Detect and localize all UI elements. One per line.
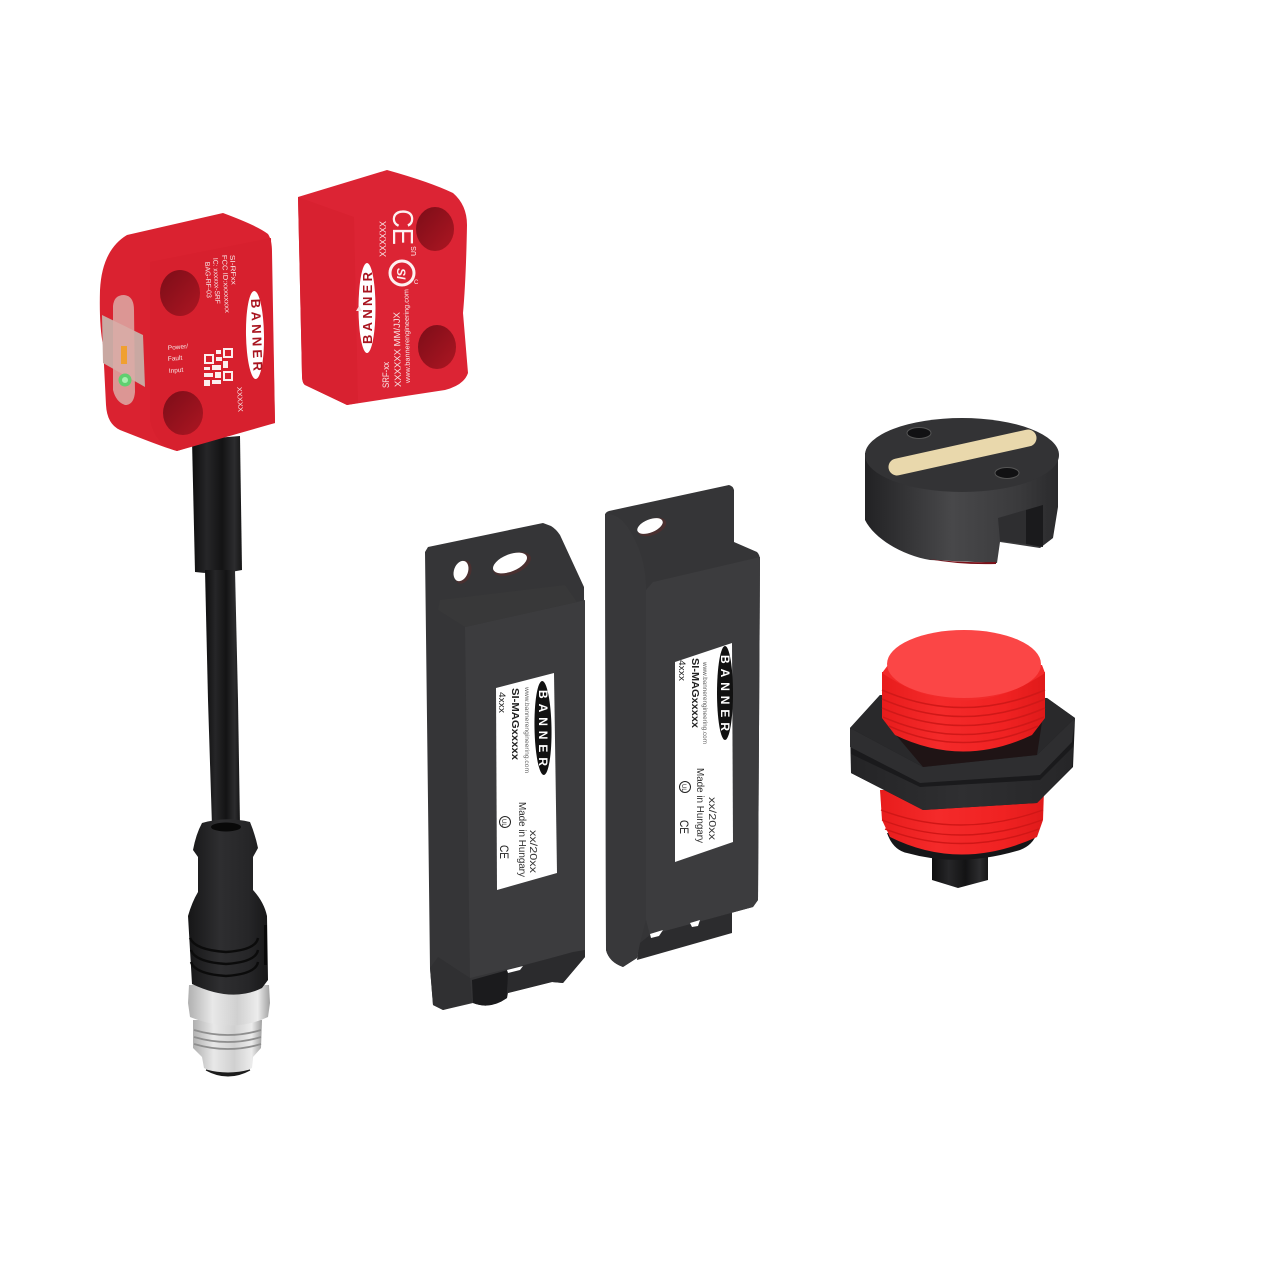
bottom tab xyxy=(507,950,585,993)
label: SI-MAGxxxxx xyxy=(509,688,520,760)
label: Made in Hungary xyxy=(694,768,705,843)
sensing insert xyxy=(897,438,1028,467)
threaded barrel sensor xyxy=(850,630,1075,888)
product text: BAG-RF-03 xyxy=(203,262,212,298)
mounting holes xyxy=(160,270,200,316)
actuator text: SRF-xx xyxy=(381,362,391,388)
certification mark: C xyxy=(414,280,419,286)
label xyxy=(675,643,733,862)
puck notch xyxy=(998,505,1043,546)
CE mark: CE xyxy=(386,209,418,245)
mounting slot xyxy=(635,514,669,540)
product text: SI-RFxx xyxy=(228,255,237,286)
LED labels: Fault xyxy=(168,355,183,363)
actuator text: XXXXXX MM/JJX xyxy=(392,312,403,387)
magnetic puck actuator xyxy=(865,418,1059,564)
upper thread xyxy=(882,672,1045,752)
label: BANNER xyxy=(718,655,732,731)
slot xyxy=(507,966,523,973)
top shelf xyxy=(438,585,577,627)
label: 4xxx xyxy=(677,660,687,682)
label: 4xxx xyxy=(497,692,507,714)
product text: FCC ID:xxxxxxxx xyxy=(220,255,230,314)
product text: XXXXX xyxy=(235,387,243,412)
front face xyxy=(465,600,585,978)
cable xyxy=(205,570,240,826)
metal thread xyxy=(193,1020,262,1075)
sensor body xyxy=(100,213,275,451)
sensor: red coded actuator xyxy=(298,170,468,405)
housing xyxy=(605,485,760,967)
metal nut xyxy=(188,985,270,1026)
product text xyxy=(203,255,243,412)
label: CE xyxy=(677,820,691,834)
strain relief xyxy=(192,436,242,573)
mounting holes xyxy=(416,207,454,251)
puck top xyxy=(865,418,1059,492)
M12 connector xyxy=(188,819,270,1076)
label: xx/20xx xyxy=(706,797,717,840)
pin xyxy=(472,970,508,1006)
red cap xyxy=(882,665,1045,700)
actuator text: www.bannerengineering.com xyxy=(403,289,412,384)
certification mark: US xyxy=(411,246,418,256)
washer xyxy=(887,833,1037,860)
lower nut xyxy=(851,747,1073,810)
LED window xyxy=(102,295,145,405)
lower thread xyxy=(880,790,1044,854)
LED labels: Input xyxy=(169,367,184,375)
nut shadow xyxy=(885,722,1042,767)
actuator body xyxy=(298,170,468,405)
LED labels xyxy=(168,343,189,375)
label: xx/20xx xyxy=(527,830,538,873)
label: www.bannerengineering.com xyxy=(523,686,530,773)
connector body xyxy=(188,819,268,995)
label: BANNER xyxy=(536,690,550,766)
puck side xyxy=(865,453,1058,563)
label: www.bannerengineering.com xyxy=(701,661,708,744)
magnetic sensor 2 xyxy=(605,485,760,967)
certification mark xyxy=(390,246,419,286)
upper nut top xyxy=(850,695,1075,767)
front face xyxy=(646,557,760,935)
actuator text: XXXXXX xyxy=(378,221,388,257)
housing xyxy=(425,523,585,1010)
label: SI-MAGxxxxx xyxy=(689,658,700,728)
actuator text xyxy=(378,221,412,388)
hex nuts xyxy=(850,695,1075,810)
screw holes xyxy=(907,428,931,438)
magnetic sensor 1 xyxy=(425,523,585,1010)
QR code xyxy=(204,348,233,386)
sensor: red RF sensor with LEDs xyxy=(100,213,275,451)
BANNER logo: BANNER xyxy=(360,271,375,344)
cable assembly xyxy=(188,436,270,1076)
product text: IC: xxxxxx-SRF xyxy=(211,258,220,304)
upper nut front xyxy=(850,718,1075,783)
label: UL xyxy=(680,784,686,792)
rear bottom tab xyxy=(637,908,732,960)
mounting holes xyxy=(451,547,534,586)
nut backing xyxy=(850,695,1075,810)
cable stub xyxy=(932,850,988,888)
label: Made in Hungary xyxy=(516,802,527,877)
label: UL xyxy=(500,819,506,827)
BANNER logo: BANNER xyxy=(248,299,266,372)
certification mark: SI xyxy=(394,268,408,280)
bottom slots xyxy=(650,930,663,938)
side rail xyxy=(605,514,646,967)
LED labels: Power/ xyxy=(168,343,189,352)
label: CE xyxy=(497,845,511,859)
label xyxy=(496,673,557,890)
